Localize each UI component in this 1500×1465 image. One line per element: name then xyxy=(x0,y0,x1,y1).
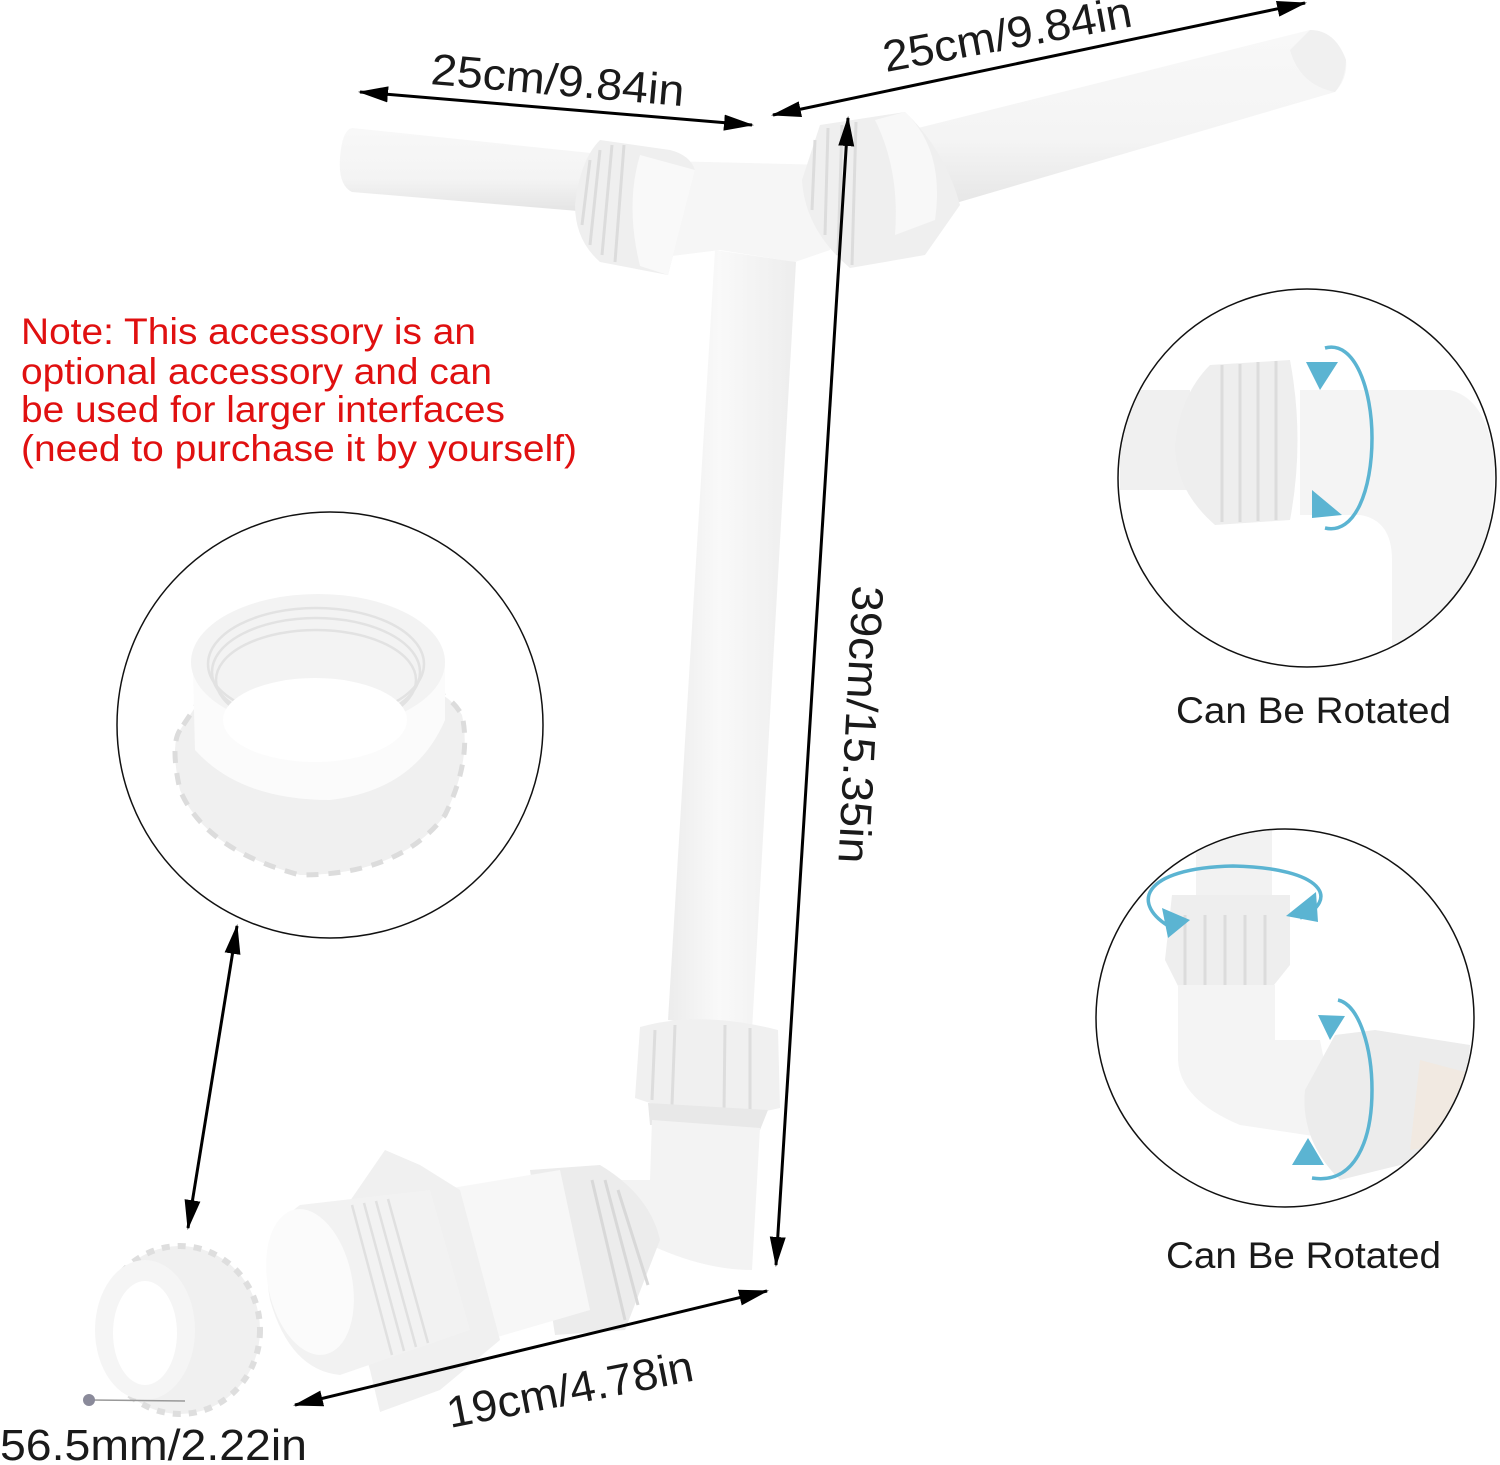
inner tan face xyxy=(1410,1060,1465,1150)
horizontal collar teeth xyxy=(592,1180,648,1320)
dimension arrow: height xyxy=(776,118,848,1265)
dimension arrow: right arm xyxy=(773,3,1305,115)
circle: ring detail xyxy=(117,512,543,938)
left collar face xyxy=(632,155,695,275)
inner thread xyxy=(191,594,445,730)
left collar teeth xyxy=(582,145,624,262)
vertical pipe xyxy=(1196,830,1272,900)
threads xyxy=(352,1199,428,1355)
note xyxy=(21,311,577,469)
elbow xyxy=(600,1120,760,1270)
arrowheads xyxy=(1306,362,1342,518)
left arm xyxy=(340,128,610,212)
side collar xyxy=(1304,1030,1470,1180)
dimension arrow: base xyxy=(295,1291,767,1405)
left collar xyxy=(575,140,695,275)
opening xyxy=(254,1201,366,1363)
pipe stub xyxy=(1120,390,1190,490)
note: be used for larger interfaces xyxy=(21,389,505,430)
dimension label: left arm: 25cm/9.84in xyxy=(429,45,686,116)
note: (need to purchase it by yourself) xyxy=(21,428,577,469)
thread lines xyxy=(208,608,424,730)
arrow: ring to magnified view xyxy=(188,926,237,1228)
dimension pointer: ring xyxy=(83,1394,185,1406)
dimension label: base: 19cm/4.78in xyxy=(443,1342,697,1438)
neck xyxy=(193,660,445,800)
lower collar xyxy=(635,1019,780,1115)
body xyxy=(440,1170,590,1345)
lower collar shadow xyxy=(648,1103,768,1130)
collar xyxy=(1165,895,1290,990)
tee body xyxy=(625,160,830,262)
dimension label: height: 39cm/15.35in xyxy=(828,584,892,865)
ring accessory, small xyxy=(95,1246,260,1414)
right arm xyxy=(890,30,1346,215)
product: fountain pipe xyxy=(254,30,1346,1412)
toothed ring xyxy=(175,690,465,875)
note: optional accessory and can xyxy=(21,351,492,392)
right collar teeth xyxy=(812,122,856,265)
right arm end cap xyxy=(1290,30,1346,92)
circle: top rotation detail xyxy=(1118,289,1496,667)
threaded end xyxy=(267,1190,470,1375)
horizontal collar xyxy=(530,1165,660,1335)
circle: bottom rotation detail xyxy=(1096,829,1474,1207)
rotation ellipse side xyxy=(1312,1000,1372,1179)
vertical pipe xyxy=(668,250,796,1030)
opening xyxy=(223,678,407,762)
caption: top rotation: Can Be Rotated xyxy=(1176,690,1451,731)
collar teeth xyxy=(1185,915,1265,988)
rotation arc xyxy=(1325,347,1372,529)
right collar xyxy=(802,112,960,268)
lower collar teeth xyxy=(652,1025,750,1112)
elbow xyxy=(1300,390,1495,660)
collar xyxy=(1175,360,1298,525)
rotation ellipse top xyxy=(1148,866,1321,928)
right collar face xyxy=(875,112,937,235)
collar teeth xyxy=(1222,361,1276,522)
note: Note: This accessory is an xyxy=(21,311,476,352)
flange xyxy=(330,1150,500,1412)
caption: bottom rotation: Can Be Rotated xyxy=(1166,1235,1441,1276)
arrowheads xyxy=(1162,892,1345,1165)
dimension arrow: left arm xyxy=(360,92,752,125)
elbow xyxy=(1178,985,1323,1136)
